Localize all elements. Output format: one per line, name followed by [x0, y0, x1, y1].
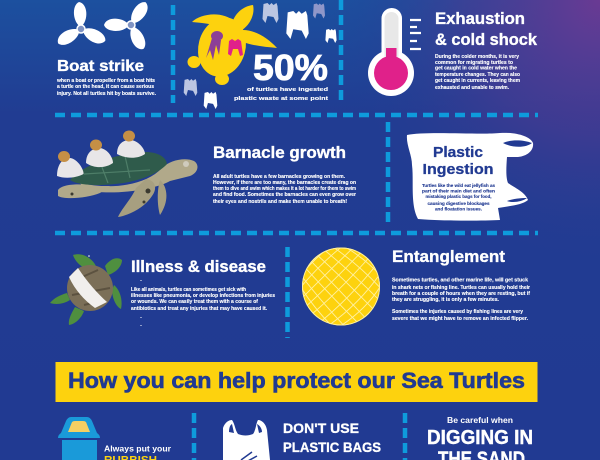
heading: barnacle growth: Barnacle growth: [213, 143, 346, 162]
text: entanglement: [392, 278, 530, 322]
text: statistic caption: plastic waste at some point: [234, 96, 328, 102]
heading: boat strike: Boat strike: [57, 58, 144, 75]
text: boat strike: injury. Not all turtles hit by boats survive.: [57, 91, 157, 97]
text: boat strike: when a boat or propeller from a boat hits: [56, 78, 155, 84]
panel: plastic ingestion bag: [407, 133, 533, 221]
barnacle 1: [57, 151, 84, 178]
text: exhaustion: [435, 54, 521, 91]
icon: plastic bag: [223, 420, 271, 460]
turtle front flippers: [118, 179, 166, 217]
heading: exhaustion and cold shock: [435, 9, 538, 49]
icon: boat propellers: [55, 0, 151, 52]
text: boat strike: [56, 78, 157, 97]
text: boat strike: a turtle on the head, it can cause serious: [57, 84, 154, 90]
text: digging in the sand: Be careful when: [447, 415, 513, 425]
heading: exhaustion and cold shock: & cold shock: [435, 30, 538, 49]
heading: entanglement: Entanglement: [392, 247, 505, 266]
text: plastic ingestion: [422, 183, 495, 212]
text: plastic ingestion: part of their main diet and often: [422, 188, 495, 194]
statistic: 50%: 50%: [253, 47, 328, 88]
text: entanglement: Sometimes turtles, and other marine life, will get stuck: [392, 278, 528, 284]
text: digging in the sand: [427, 415, 533, 460]
text: illness: Like all animals, turtles can sometimes get sick with: [131, 287, 246, 293]
text: barnacle: and find food. Sometimes the barnacles can even grow over: [213, 192, 356, 198]
icon: turtle with barnacles: [57, 130, 197, 217]
text: illness: [131, 287, 275, 312]
icon: bandaged turtle: [50, 254, 122, 325]
icon: yellow fishing net: [302, 248, 380, 326]
text: exhaustion: common for migrating turtles to: [435, 60, 513, 66]
icon: rubbish bin: [58, 417, 100, 460]
text: plastic ingestion: mistaking plastic bags for food,: [426, 194, 492, 199]
barnacle 2: [86, 140, 113, 167]
text: digging in the sand: DIGGING IN: [427, 427, 533, 449]
text: plastic ingestion: Turtles like the wild eat jellyfish as: [422, 183, 495, 188]
text: rubbish: [104, 444, 172, 460]
icon: jellyfish: [206, 31, 223, 60]
text: plastic ingestion: and floatation issues.: [435, 206, 482, 212]
text: illness: illnesses like pneumonia, or develop infections from injuries: [131, 293, 275, 299]
text: barnacle: All adult turtles have a few barnacles growing on them.: [213, 174, 346, 180]
heading: exhaustion and cold shock: Exhaustion: [435, 9, 525, 28]
icon: yellow turtle: [188, 5, 277, 85]
turtle body and head: [80, 159, 197, 192]
heading: plastic ingestion: [422, 144, 494, 178]
text: don't use plastic bags: [283, 420, 381, 455]
text: entanglement: they are struggling, it is only a few minutes.: [392, 297, 500, 303]
text: exhaustion: get caught in cold water when the: [435, 66, 517, 72]
text: entanglement: Sometimes the injuries caused by fishing lines are very: [392, 309, 523, 315]
text: rubbish: Always put your: [104, 444, 172, 454]
icon: pink plastic: [228, 39, 243, 56]
decorative dots: [140, 280, 142, 326]
text: barnacle: [213, 174, 356, 205]
banner: how you can help: [56, 362, 538, 402]
text: entanglement: severe that we might have to remove an infected flipper.: [392, 316, 529, 322]
text: plastic ingestion: causing digestive blockages: [428, 201, 490, 206]
text: entanglement: in shark nets or fishing line. Turtles can usually hold their: [392, 285, 530, 291]
heading: plastic ingestion: Ingestion: [422, 161, 494, 178]
text: barnacle: them to dive and swim which makes it a lot harder for them to swim: [213, 186, 356, 192]
text: don't use plastic bags: DON'T USE: [283, 420, 359, 436]
text: entanglement: breath for a couple of hours when they are resting, but if: [392, 291, 530, 297]
heading: plastic ingestion: Plastic: [433, 144, 483, 161]
text: don't use plastic bags: PLASTIC BAGS: [283, 439, 381, 455]
text: exhaustion: During the colder months, it is very: [435, 54, 519, 60]
text: exhaustion: temperature changes. They can also: [435, 72, 520, 78]
text: statistic caption: of turtles have ingested: [247, 87, 328, 93]
text: illness: or wounds. We can easily treat them with a course of: [131, 299, 258, 305]
text: barnacle: However, if there are too many, the barnacles create drag on: [213, 180, 356, 186]
heading: illness and disease: Illness & disease: [131, 257, 266, 276]
text: statistic caption: [234, 87, 328, 102]
icon: thermometer: [368, 8, 421, 96]
text: exhaustion: exhausted and unable to swim.: [435, 85, 510, 91]
turtle shell: [70, 152, 167, 185]
banner: how you can help: How you can help protect our Sea Turtles: [68, 368, 525, 393]
icons: floating plastic bags: [184, 3, 337, 109]
text: illness: antibiotics and treat any injuries that may have caused it.: [131, 306, 268, 312]
barnacle 3: [117, 130, 145, 158]
text: exhaustion: get caught in currents, leaving them: [435, 78, 521, 84]
turtle rear flipper: [58, 184, 110, 198]
text: barnacle: their eyes and nostrils and make them unable to breath!: [213, 199, 347, 205]
